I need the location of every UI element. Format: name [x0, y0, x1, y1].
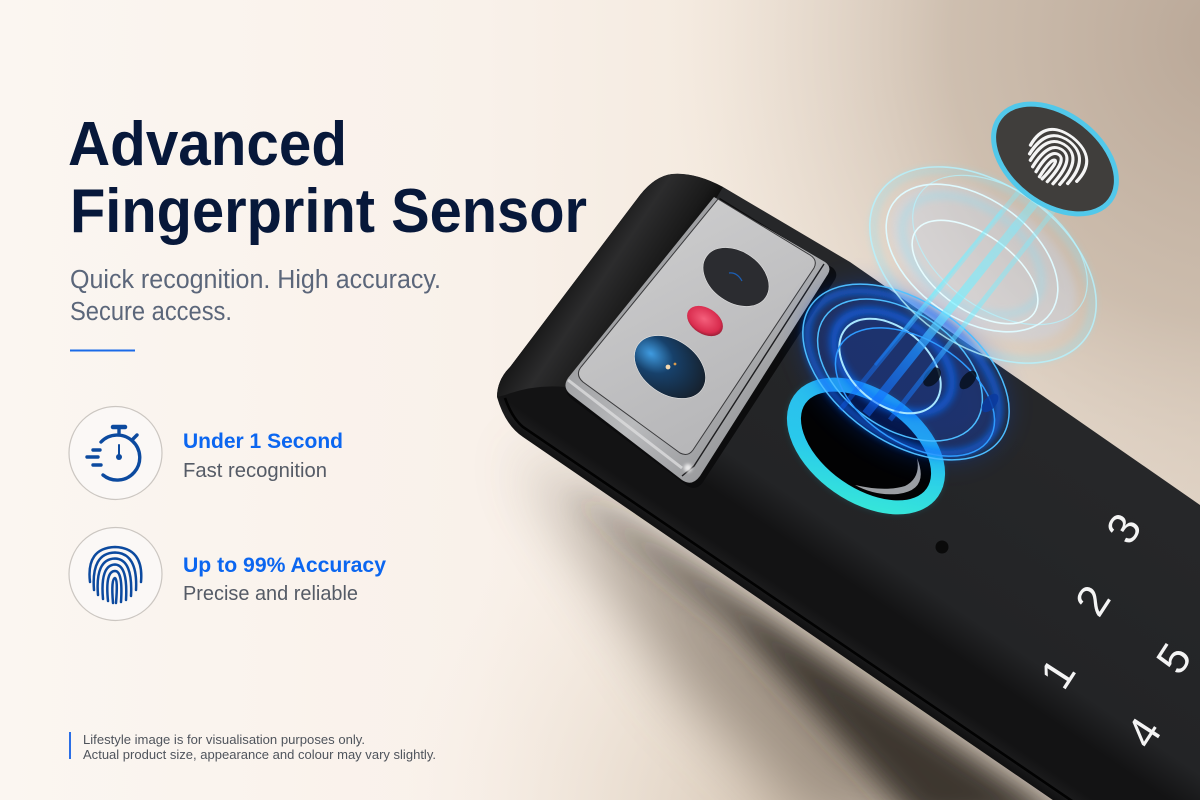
smart lock body	[497, 174, 1200, 800]
keypad digits: 3	[1097, 505, 1151, 552]
product shadow	[520, 450, 1080, 800]
keypad digits	[1031, 505, 1200, 756]
upper cyan hologram rings	[833, 126, 1133, 404]
sensor body slots	[920, 364, 1002, 415]
caption: fast recognition: Fast recognition	[183, 460, 327, 482]
keypad digits: 2	[1066, 577, 1120, 624]
upper camera lens	[692, 235, 780, 319]
red indicator LED	[682, 300, 728, 342]
lower blue hologram rings	[771, 248, 1041, 496]
scan light beams	[840, 190, 1058, 420]
feature: under 1 second	[69, 406, 343, 500]
subtitle: Quick recognition. High accuracy.	[70, 266, 441, 294]
glossy end cap	[497, 174, 723, 397]
icon: fingerprint	[69, 528, 162, 620]
keypad digits: 5	[1147, 635, 1200, 682]
disclaimer: Lifestyle image is for visualisation purposes only.	[83, 733, 365, 747]
caption: precise and reliable: Precise and reliable	[183, 583, 358, 605]
floating fingerprint disc	[973, 82, 1137, 236]
subtitle	[70, 266, 441, 326]
title	[68, 110, 587, 246]
disclaimer	[69, 732, 436, 762]
fingerprint scanner ring	[765, 352, 967, 540]
metal sensor bezel	[565, 197, 836, 488]
title: Fingerprint Sensor	[70, 177, 587, 246]
heading: accuracy: Up to 99% Accuracy	[183, 554, 386, 577]
title: Advanced	[68, 110, 347, 179]
heading: under 1 second: Under 1 Second	[183, 430, 343, 453]
icon: stopwatch	[69, 406, 162, 500]
microphone hole	[936, 540, 948, 554]
silver face plate	[578, 199, 815, 454]
disclaimer: Actual product size, appearance and colour may vary slightly.	[83, 748, 436, 762]
white fingerprint glyph	[1018, 120, 1097, 197]
keypad digits: 1	[1031, 650, 1085, 697]
subtitle: Secure access.	[70, 298, 232, 326]
lower camera lens	[623, 323, 717, 411]
feature: accuracy	[69, 528, 386, 620]
keypad digits: 4	[1117, 709, 1171, 756]
body groove	[505, 398, 1100, 800]
accent divider	[70, 350, 135, 352]
